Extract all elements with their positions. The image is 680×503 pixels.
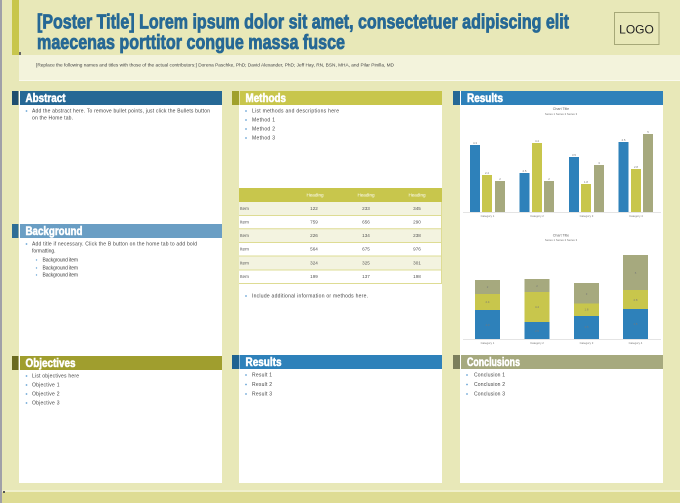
stacked bar chart: 4.4 [535, 305, 539, 309]
objectives list: Objective 3 [32, 401, 60, 407]
results list: Result 1 [252, 373, 272, 379]
data table: 976 [413, 246, 421, 252]
data table: 134 [362, 233, 370, 238]
objectives heading: Objectives [26, 358, 76, 370]
clustered bar chart: 2.8 [634, 165, 638, 169]
methods list: Method 2 [252, 127, 275, 133]
stacked bar chart: 4.3 [486, 323, 490, 327]
background heading [12, 224, 222, 238]
conclusions list: Conclusion 2 [474, 382, 505, 388]
clustered bar chart: 2 [499, 177, 501, 181]
methods heading: Methods [246, 93, 286, 105]
stacked bar chart: 2 [487, 285, 489, 289]
data table: 564 [310, 246, 318, 252]
abstract text [26, 109, 210, 122]
results charts heading: Results [467, 93, 503, 105]
panel: objectives [12, 356, 222, 407]
data table: Item [240, 220, 249, 224]
stacked bar chart: 2.5 [535, 329, 539, 333]
data table: Item [240, 206, 249, 211]
background text: Background item [42, 266, 78, 272]
objectives list: Objective 1 [32, 383, 60, 389]
methods list: Method 3 [252, 136, 275, 142]
data table: 226 [310, 233, 318, 238]
background text: formatting. [32, 249, 56, 255]
stacked bar chart: 2.4 [486, 300, 490, 304]
data table: Item [240, 274, 249, 279]
data table: 675 [362, 246, 370, 252]
objectives list: List objectives here [32, 374, 79, 380]
stacked bar chart: Category 1 [481, 341, 495, 345]
results list: Result 3 [252, 392, 272, 398]
stacked bar chart: Category 2 [530, 341, 544, 345]
clustered bar chart: Category 4 [629, 214, 643, 218]
data table: Heading [357, 192, 375, 198]
data table: 656 [362, 220, 370, 224]
clustered bar chart: Category 3 [580, 214, 594, 218]
results list: Result 2 [252, 382, 272, 388]
methods list: List methods and descriptions here [252, 109, 339, 115]
clustered bar chart: 5 [647, 130, 649, 134]
clustered bar chart: Series 1 Series 2 Series 3 [545, 112, 578, 116]
data table: 345 [413, 206, 421, 211]
stacked bar chart: Category 4 [629, 341, 643, 345]
conclusions list [466, 373, 505, 398]
stacked bar chart: Category 3 [580, 341, 594, 345]
footer band [2, 490, 680, 503]
data table: 759 [310, 220, 318, 224]
contributors band: [Replace the following names and titles with those of the actual contributors:] Dorena Paschke, PhD; David Alexander, PhD; Jeff Hay, RN, BSN, MHA, and Pilar Pinilla, MD [36, 62, 394, 68]
data table: 238 [413, 233, 421, 238]
background text: Background item [42, 273, 78, 279]
clustered bar chart: 3.5 [572, 153, 576, 157]
logo box: LOGO [619, 22, 654, 36]
abstract heading: Abstract [26, 93, 66, 105]
stacked bar chart: 2.8 [634, 298, 638, 302]
data table: Heading [306, 192, 324, 198]
abstract heading [12, 91, 222, 105]
data table: Item [240, 260, 249, 266]
stacked bar chart: Chart Title [553, 234, 569, 238]
data table: Item [240, 233, 249, 238]
clustered bar chart: 4.3 [473, 141, 477, 145]
data table: 137 [362, 274, 370, 279]
panel: results (middle) [232, 355, 442, 398]
objectives list: Objective 2 [32, 392, 60, 398]
abstract text: Add the abstract here. To remove bullet points, just click the Bullets button [32, 109, 210, 115]
clustered bar chart: 4.4 [535, 139, 539, 143]
logo box [614, 12, 659, 44]
clustered bar chart: Category 1 [481, 214, 495, 218]
panel: results (charts) [453, 91, 663, 345]
data table: Item [240, 246, 249, 252]
data table: Heading [408, 192, 426, 198]
panel: methods [232, 91, 442, 300]
poster title [37, 12, 569, 54]
panel: middle column background [239, 91, 442, 483]
results heading [232, 355, 442, 369]
objectives heading [12, 356, 222, 370]
panel: background [12, 224, 222, 279]
background text: Background item [42, 258, 78, 264]
panel: abstract [12, 91, 222, 122]
stacked bar chart: 5 [635, 271, 637, 275]
results charts heading [453, 91, 663, 105]
data table: 122 [310, 206, 318, 211]
methods list: Method 1 [252, 118, 275, 124]
methods heading [232, 91, 442, 105]
data table: 301 [413, 260, 421, 266]
stacked bar chart [463, 234, 661, 345]
poster title: maecenas porttitor congue massa fusce [37, 32, 345, 54]
stacked bar chart: 2 [536, 284, 538, 288]
methods list [245, 109, 339, 142]
methods note: Include additional information or methods here. [252, 294, 368, 300]
abstract text: on the Home tab. [32, 116, 73, 122]
clustered bar chart: 3 [598, 161, 600, 165]
data table: 290 [413, 220, 421, 224]
stacked bar chart: 1.8 [585, 308, 589, 312]
stacked bar chart: 4.5 [634, 322, 638, 326]
header accent bar [12, 0, 21, 55]
clustered bar chart: 4.5 [622, 138, 626, 142]
stacked bar chart: 3 [586, 292, 588, 296]
data table: 198 [413, 274, 421, 279]
clustered bar chart: Category 2 [530, 214, 544, 218]
background text [26, 242, 197, 279]
panel: conclusions [453, 355, 663, 398]
data table: 324 [310, 260, 318, 266]
contributors band [19, 55, 680, 81]
data table [239, 188, 442, 284]
panel: right column background [460, 91, 663, 483]
clustered bar chart: 1.8 [584, 180, 588, 184]
data table: 325 [362, 260, 370, 266]
conclusions heading [453, 355, 663, 369]
background heading: Background [26, 226, 82, 238]
conclusions heading: Conclusions [467, 357, 520, 369]
stacked bar chart: 3.5 [585, 325, 589, 329]
conclusions list: Conclusion 1 [474, 373, 505, 379]
stacked bar chart: Series 1 Series 2 Series 3 [545, 238, 578, 242]
data table: 233 [362, 206, 370, 211]
results list [245, 373, 272, 398]
data table: 199 [310, 274, 318, 279]
clustered bar chart: 2.4 [485, 171, 489, 175]
clustered bar chart [463, 107, 661, 218]
clustered bar chart: 2 [548, 177, 550, 181]
panel: left column background [19, 91, 222, 483]
clustered bar chart: 2.5 [523, 169, 527, 173]
conclusions list: Conclusion 3 [474, 392, 505, 398]
results heading: Results [246, 357, 282, 369]
clustered bar chart: Chart Title [553, 107, 569, 111]
background text: Add title if necessary. Click the B button on the home tab to add bold [32, 242, 197, 248]
objectives list [26, 374, 79, 407]
